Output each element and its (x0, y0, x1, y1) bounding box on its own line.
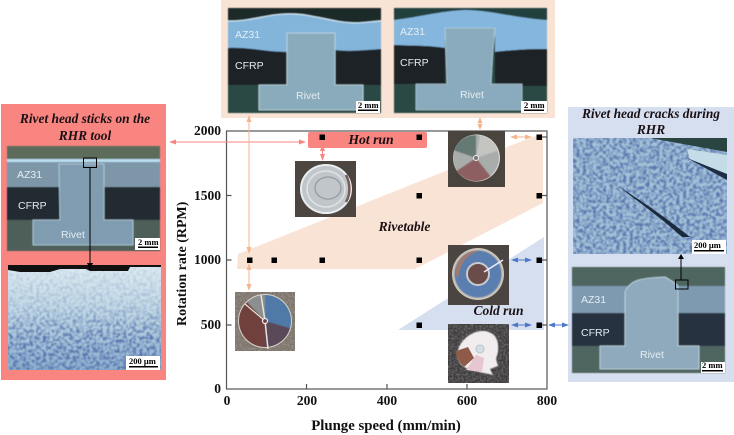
region: cold run (398, 237, 544, 330)
heading: rivet head cracks: Rivet head cracks during (581, 106, 720, 121)
photo: rivet head disk cold run 500 (448, 324, 509, 383)
plot frame and ticks (226, 131, 547, 389)
y axis tick labels: 0 (214, 381, 221, 396)
x axis tick labels (224, 393, 557, 408)
scale bar: 2 mm (356, 100, 380, 113)
scale bar: 2 mm (701, 360, 725, 373)
photo: sticking microstructure (8, 265, 161, 370)
label: rivetable: Rivetable (378, 219, 430, 234)
arrow: top panel to disk (478, 117, 482, 130)
y axis tick labels: 500 (201, 317, 221, 332)
arrow: disk to cold point at 500 (511, 322, 532, 328)
y axis tick labels: 2000 (194, 123, 221, 138)
panel: rivet head cracks during RHR (568, 106, 734, 382)
photo: cracked cross section (572, 267, 725, 373)
y axis title: Rotation rate (RPM) (175, 201, 190, 326)
x axis tick labels: 600 (457, 393, 477, 408)
label: hot run: Hot run (347, 132, 394, 147)
label: CFRP: CFRP (581, 327, 610, 339)
x axis tick labels: 800 (537, 393, 557, 408)
scale bar: 200 µm: 200 μm (129, 356, 156, 366)
arrow: top panel to low speed point (246, 115, 252, 254)
x axis tick labels: 0 (224, 393, 231, 408)
scale bar: 2 mm (521, 100, 547, 113)
x axis tick labels: 200 (297, 393, 317, 408)
y axis tick labels: 1500 (194, 188, 221, 203)
label: Rivet: Rivet (640, 349, 664, 361)
photo: cross section at low plunge speed (228, 8, 381, 113)
x axis title: Plunge speed (mm/min) (311, 418, 461, 434)
arrow: cold point to cracks panel (548, 322, 569, 328)
photo: cross section at high plunge speed (394, 8, 547, 113)
heading: rivet head cracks: RHR (636, 122, 665, 137)
label: CFRP: CFRP (235, 60, 264, 72)
region: rivetable (237, 133, 543, 269)
scale bar: 200 µm: 200 μm (694, 240, 721, 250)
label: AZ31: AZ31 (400, 26, 425, 38)
label: cold run: Cold run (474, 303, 523, 318)
arrow: disk to high speed point (510, 134, 532, 140)
photo: rivet head disk low speed (235, 292, 296, 352)
scale bar: 2 mm: 2 mm (358, 100, 379, 110)
label: Rivet: Rivet (61, 229, 85, 241)
arrow: disk to cold point at 1000 (511, 258, 532, 262)
arrow: crack box to microstructure (676, 254, 688, 289)
label: AZ31: AZ31 (17, 169, 42, 181)
scale bar: 2 mm: 2 mm (138, 237, 159, 247)
photo: sticking cross section (7, 146, 160, 251)
heading: rivet head sticks: RHR tool (58, 128, 112, 143)
y axis tick labels: 1000 (194, 252, 221, 267)
scale bar: 200 µm (692, 240, 726, 254)
photo: rivet head disk cold run 1000 (448, 245, 509, 305)
label: CFRP: CFRP (18, 200, 47, 212)
heading: rivet head sticks (19, 111, 150, 143)
x axis tick labels: 400 (377, 393, 397, 408)
label: AZ31: AZ31 (235, 29, 260, 41)
scale bar: 2 mm (135, 237, 160, 250)
photo: crack microstructure (573, 138, 727, 254)
label: Rivet: Rivet (460, 89, 484, 101)
panel: rivetable cross sections (221, 0, 555, 118)
data points (247, 134, 542, 328)
label: AZ31: AZ31 (581, 294, 606, 306)
scale bar: 2 mm: 2 mm (524, 100, 545, 110)
photo: rivet head disk hot run (295, 161, 356, 217)
heading: rivet head sticks: Rivet head sticks on the (19, 111, 150, 126)
heading: rivet head cracks (581, 106, 720, 137)
arrow: hot run point to disk (320, 144, 325, 161)
chart: rotation rate vs plunge speed (175, 123, 557, 434)
scale bar: 200 µm (126, 356, 160, 370)
arrow: detail box to microstructure (84, 158, 96, 269)
photo: rivet head disk rivetable (448, 131, 505, 187)
region: hot run (308, 132, 427, 148)
label: CFRP: CFRP (400, 57, 429, 69)
arrow: low speed point to disk (246, 263, 252, 291)
panel: rivet head sticks on the RHR tool (1, 104, 166, 380)
y axis tick labels (194, 123, 221, 396)
label: Rivet: Rivet (296, 90, 320, 102)
scale bar: 2 mm: 2 mm (702, 360, 723, 370)
arrow: hot run to sticking panel (169, 140, 306, 144)
